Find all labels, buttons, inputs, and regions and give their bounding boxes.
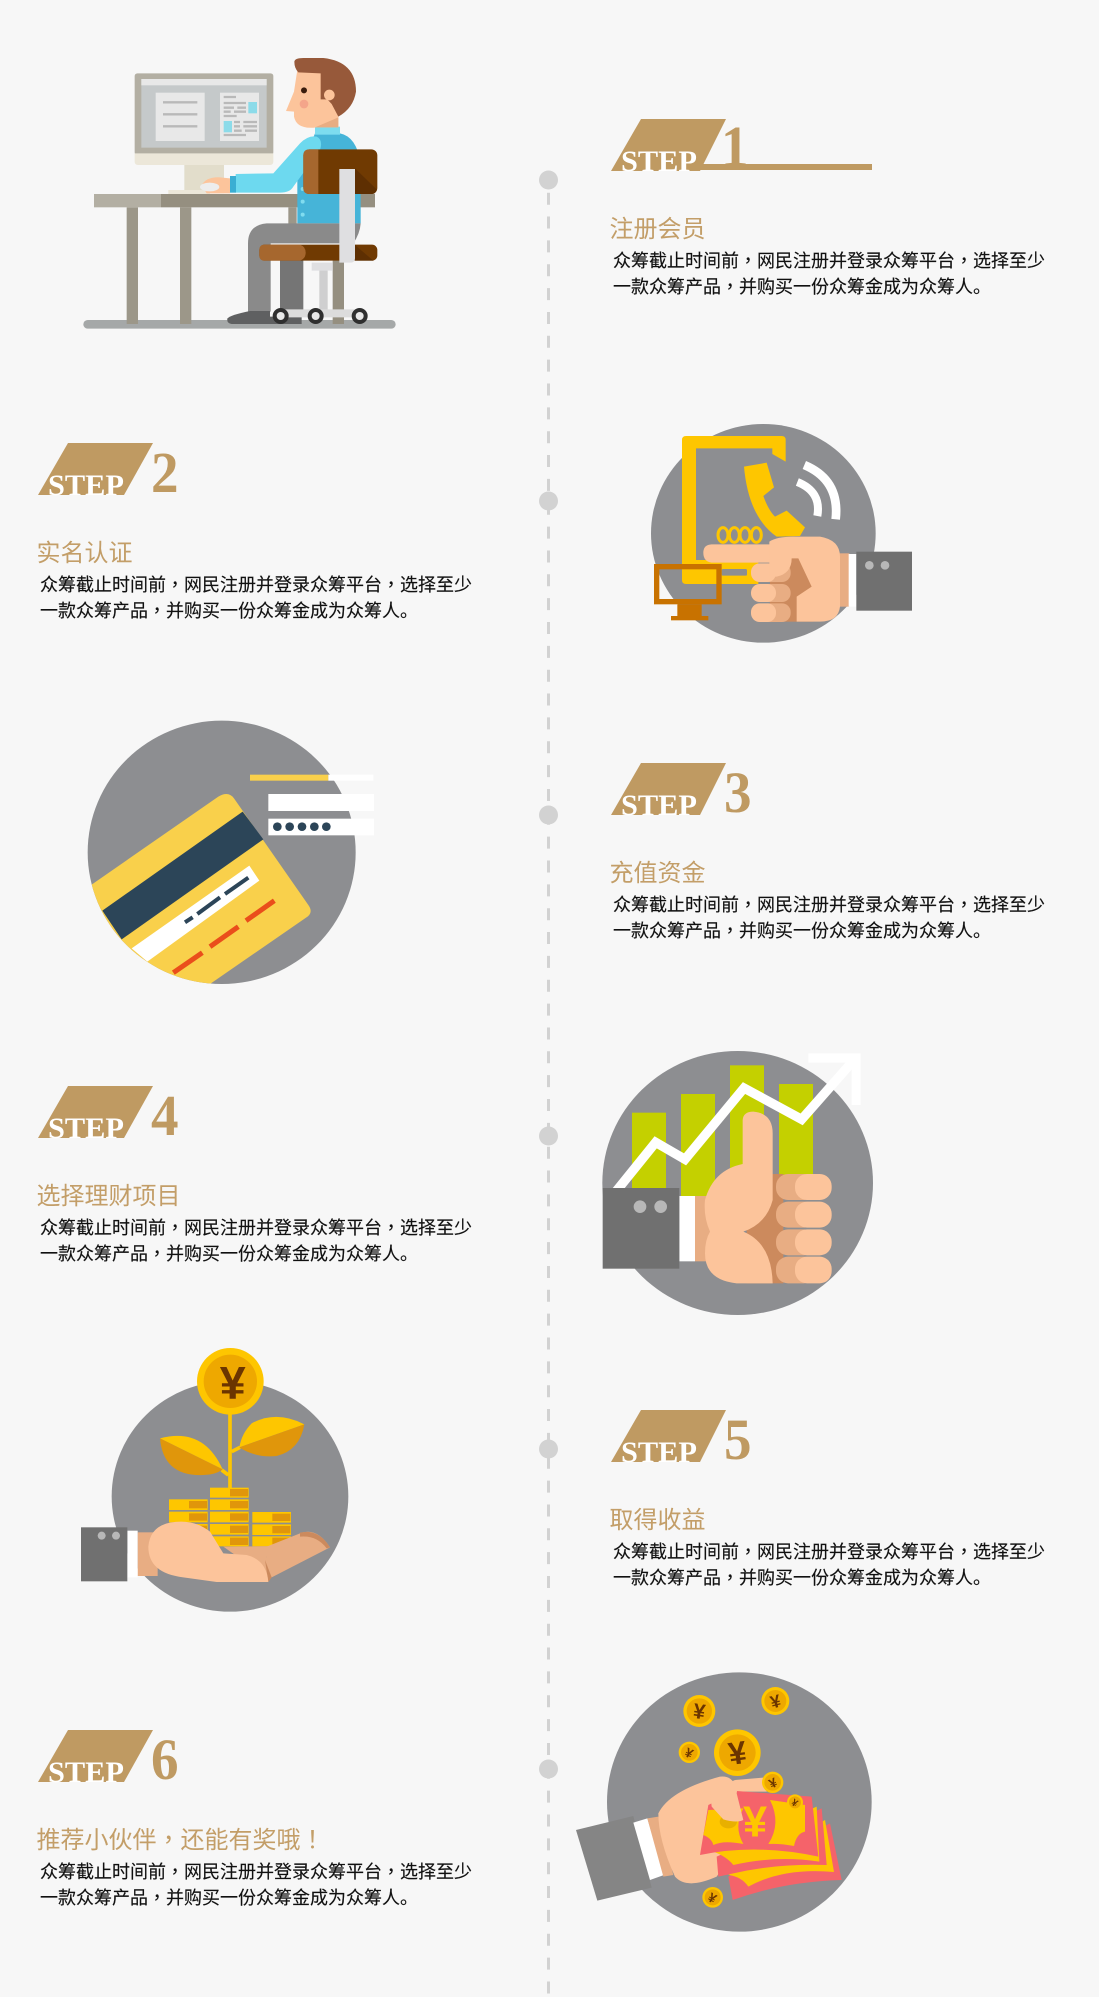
illustration: thumbs up with rising bar chart xyxy=(602,1051,873,1315)
step 2 description: 众筹截止时间前，网民注册并登录众筹平台，选择至少 xyxy=(40,575,472,595)
panel: step 2 xyxy=(36,442,472,621)
step 1 description: 众筹截止时间前，网民注册并登录众筹平台，选择至少 xyxy=(613,251,1045,271)
step 3 badge xyxy=(611,762,752,825)
step 6 badge: STEP xyxy=(48,1756,124,1789)
illustration: hand holding banknotes and coins: ¥ xyxy=(789,1797,800,1810)
step 2 badge xyxy=(38,442,179,505)
illustration: hand holding banknotes and coins: ¥ xyxy=(766,1774,780,1791)
illustration: money plant on open hand xyxy=(81,1348,348,1612)
step 3 description xyxy=(613,895,1045,941)
step 5 description xyxy=(613,1542,1045,1588)
illustration: hand holding banknotes and coins xyxy=(576,1672,872,1932)
step 5 heading: 取得收益 xyxy=(610,1507,706,1534)
step 5 badge: STEP xyxy=(621,1436,697,1469)
step 2 badge: STEP xyxy=(48,469,124,502)
step 1 badge xyxy=(611,116,872,179)
panel: step 3 xyxy=(610,762,1045,941)
illustration: hand holding banknotes and coins: ¥ xyxy=(743,1799,767,1847)
illustration: hand holding banknotes and coins: ¥ xyxy=(726,1734,749,1772)
step 3 description: 众筹截止时间前，网民注册并登录众筹平台，选择至少 xyxy=(613,895,1045,915)
step 3 badge: 3 xyxy=(724,762,752,825)
illustration: phone verification with pointing hand xyxy=(651,424,912,643)
timeline dashed line with dots xyxy=(539,170,558,1994)
step 3 heading: 充值资金 xyxy=(610,860,706,887)
panel: step 5 xyxy=(610,1409,1045,1588)
step 2 description: 一款众筹产品，并购买一份众筹金成为众筹人。 xyxy=(40,601,418,621)
step 5 badge xyxy=(611,1409,752,1472)
panel: step 4 xyxy=(36,1085,472,1264)
step 6 badge xyxy=(38,1729,179,1792)
step 3 description: 一款众筹产品，并购买一份众筹金成为众筹人。 xyxy=(613,921,991,941)
step 4 badge: 4 xyxy=(151,1085,179,1148)
step 6 badge: 6 xyxy=(151,1729,179,1792)
illustration: hand holding banknotes and coins: ¥ xyxy=(692,1699,707,1724)
panel: step 6 xyxy=(36,1729,472,1908)
step 5 description: 一款众筹产品，并购买一份众筹金成为众筹人。 xyxy=(613,1568,991,1588)
step 4 badge: STEP xyxy=(48,1112,124,1145)
step 1 description: 一款众筹产品，并购买一份众筹金成为众筹人。 xyxy=(613,277,991,297)
step 4 badge xyxy=(38,1085,179,1148)
step 2 badge: 2 xyxy=(151,442,179,505)
step 4 description: 众筹截止时间前，网民注册并登录众筹平台，选择至少 xyxy=(40,1218,472,1238)
step 6 description: 一款众筹产品，并购买一份众筹金成为众筹人。 xyxy=(40,1888,418,1908)
step 1 badge: STEP xyxy=(621,145,697,178)
step 1 heading: 注册会员 xyxy=(610,216,706,243)
step 1 badge: 1 xyxy=(721,116,749,179)
step 3 badge: STEP xyxy=(621,789,697,822)
step 5 badge: 5 xyxy=(724,1409,752,1472)
step 1 description xyxy=(613,251,1045,297)
step 5 description: 众筹截止时间前，网民注册并登录众筹平台，选择至少 xyxy=(613,1542,1045,1562)
illustration: hand holding banknotes and coins: ¥ xyxy=(768,1691,783,1713)
illustration: bank card and password form xyxy=(88,720,356,984)
step 6 description: 众筹截止时间前，网民注册并登录众筹平台，选择至少 xyxy=(40,1862,472,1882)
step 2 description xyxy=(40,575,472,621)
step 6 heading: 推荐小伙伴，还能有奖哦！ xyxy=(36,1827,324,1854)
illustration: hand holding banknotes and coins: ¥ xyxy=(682,1745,696,1762)
panel: step 1 xyxy=(610,116,1045,297)
step 4 description xyxy=(40,1218,472,1264)
step 4 description: 一款众筹产品，并购买一份众筹金成为众筹人。 xyxy=(40,1244,418,1264)
step 2 heading: 实名认证 xyxy=(36,540,132,567)
illustration: hand holding banknotes and coins: ¥ xyxy=(705,1890,720,1907)
step 6 description xyxy=(40,1862,472,1908)
illustration: man at computer xyxy=(83,58,396,329)
step 4 heading: 选择理财项目 xyxy=(36,1183,180,1210)
illustration: money plant on open hand: ¥ xyxy=(220,1357,246,1409)
